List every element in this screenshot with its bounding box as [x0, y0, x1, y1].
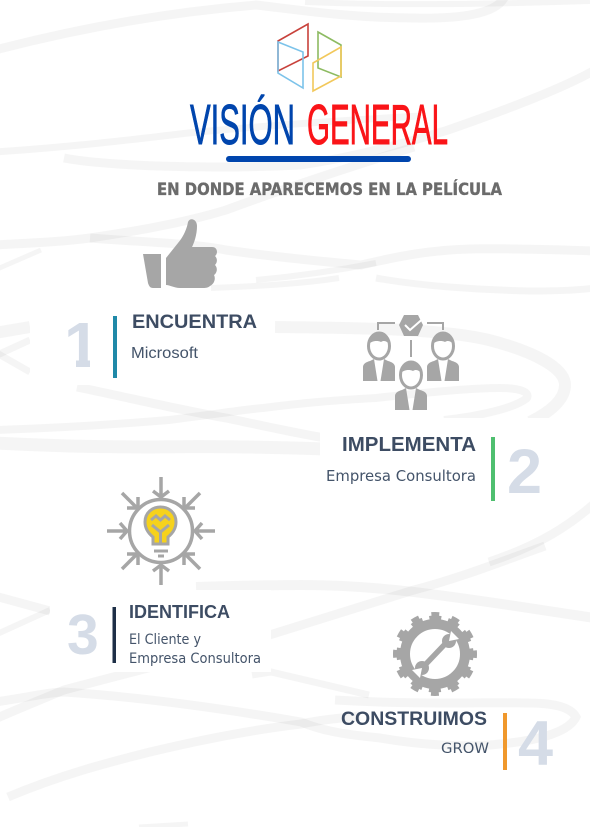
text microsoft: Microsoft [131, 345, 199, 362]
text empresa consultora: Empresa Consultora [326, 467, 476, 485]
text el cliente: El Cliente y [129, 632, 201, 648]
subtitle: EN DONDE APARECEMOS EN LA PELÍCULA [157, 180, 502, 199]
number 3: 3 [67, 603, 99, 667]
accent bar 2 [491, 437, 495, 501]
accent bar 1 [113, 316, 117, 378]
icon: idea [107, 477, 215, 585]
text grow: GROW [441, 741, 489, 757]
title: GENERAL [307, 93, 448, 157]
icon: team [363, 315, 459, 410]
number 1: 1 [64, 309, 100, 381]
icon: logo [278, 24, 341, 91]
accent bar 4 [503, 713, 507, 770]
icon: thumbs up [143, 219, 217, 288]
icon: gear with wrench [395, 614, 475, 694]
step 4: construimos [341, 708, 553, 779]
accent bar 3 [112, 607, 116, 663]
step 3: identifica [67, 602, 261, 667]
step 2: implementa [326, 434, 542, 507]
heading identifica: IDENTIFICA [129, 602, 230, 622]
heading implementa: IMPLEMENTA [342, 434, 476, 456]
number 4: 4 [518, 709, 553, 779]
title underline [226, 156, 411, 162]
title: VISIÓN [190, 93, 295, 157]
text empresa consultora: Empresa Consultora [129, 651, 261, 667]
heading encuentra: ENCUENTRA [132, 311, 257, 333]
number 2: 2 [507, 437, 542, 507]
heading construimos: CONSTRUIMOS [341, 708, 487, 730]
step 1: encuentra [68, 314, 256, 378]
